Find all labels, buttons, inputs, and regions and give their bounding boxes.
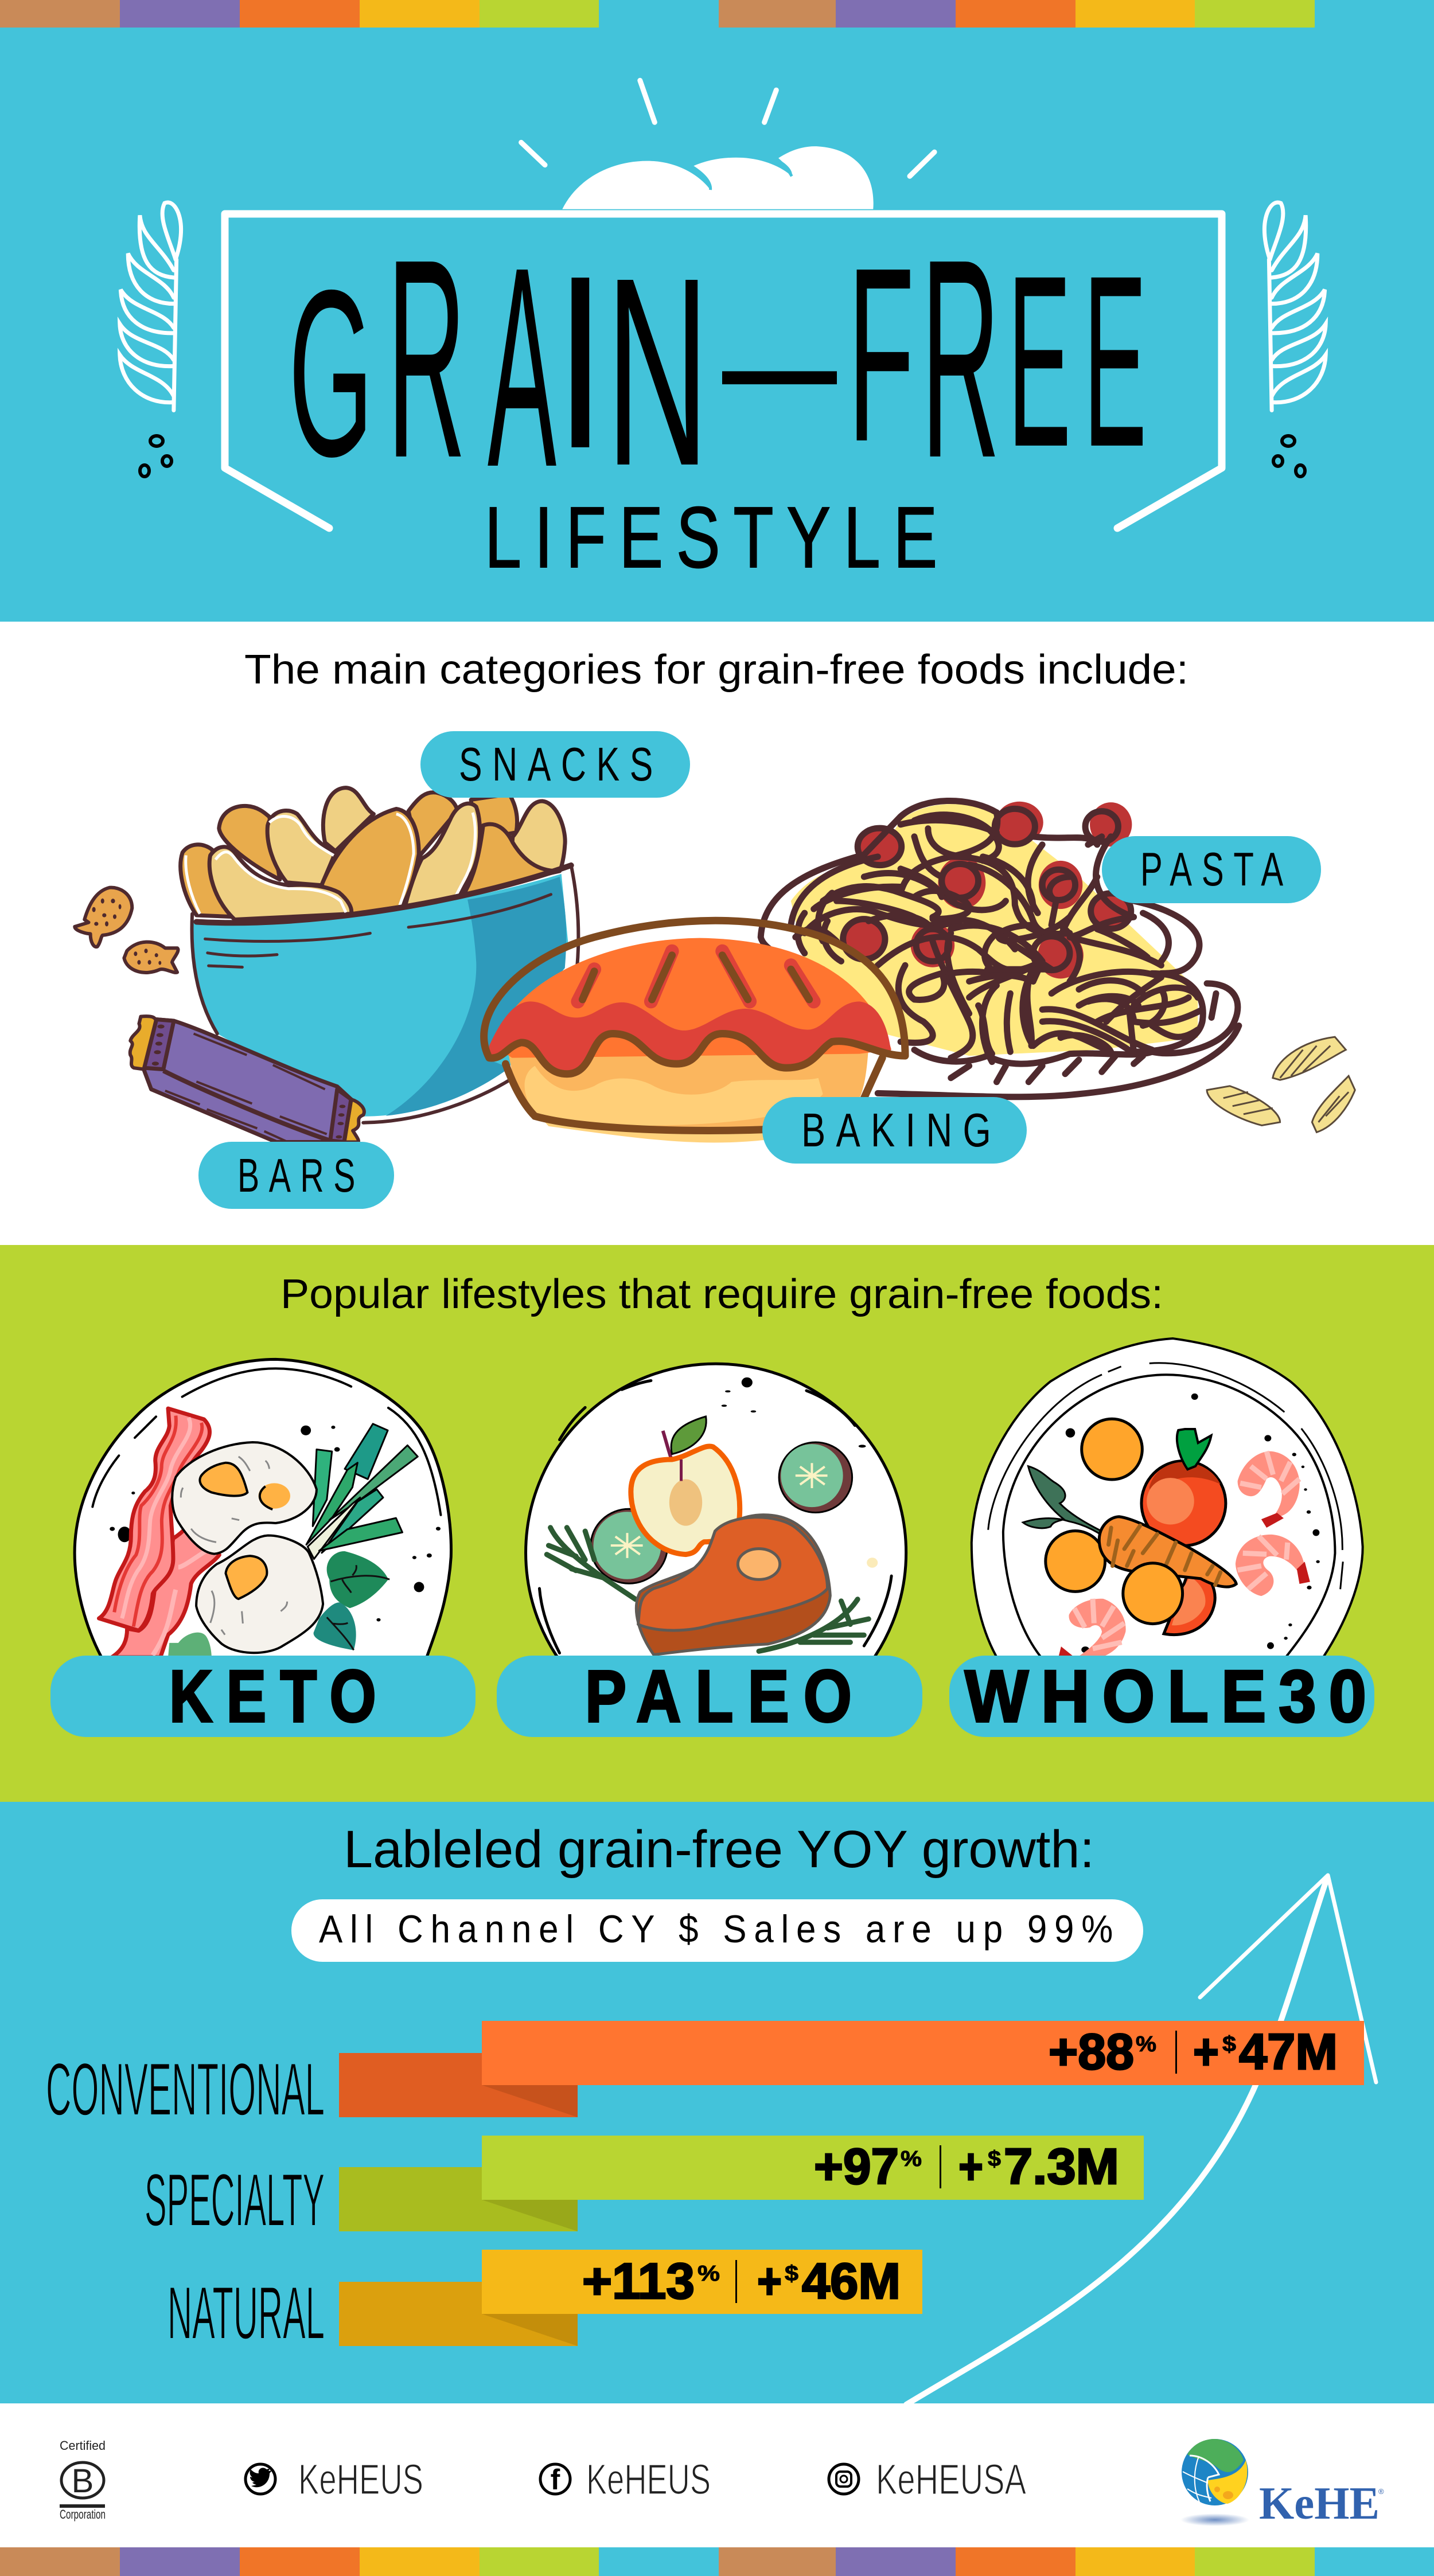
label: pasta: [1102, 836, 1321, 903]
bar: natural: $: [785, 2262, 798, 2286]
label: paleo: PALEO: [585, 1656, 866, 1738]
logo: certified b corporation: Corporation: [60, 2507, 106, 2522]
title: grain-free: G: [289, 241, 373, 506]
bar: natural: %: [697, 2262, 720, 2286]
bowl body: [192, 874, 568, 1117]
plate: paleo: [524, 1363, 907, 1656]
title: grain-free: E: [1084, 225, 1147, 498]
bar: natural: [339, 2250, 922, 2346]
title: grain-free: N: [606, 221, 710, 522]
bar: specialty: +97: [814, 2138, 899, 2195]
illustration: candy bar: [130, 1016, 364, 1142]
title: grain-free: [289, 201, 1147, 526]
orange slice left: [1046, 1531, 1105, 1591]
panel: header: [0, 0, 1434, 622]
heading: lifestyles: Popular lifestyles that require grain-free foods:: [280, 1271, 1163, 1317]
bar: natural: +: [757, 2253, 782, 2309]
label: bars: [198, 1142, 394, 1209]
label: keto: KETO: [169, 1656, 390, 1738]
right dots: [1273, 436, 1305, 477]
panel: growth: SPECIALTY: [145, 2158, 325, 2242]
left wheat: [120, 202, 181, 411]
title: grain-free: —: [722, 252, 837, 469]
illustration: chips bowl: [181, 788, 578, 1123]
apple: [631, 1416, 740, 1555]
orange slice top: [1082, 1419, 1142, 1480]
heading: categories: The main categories for grain-free foods include:: [244, 647, 1188, 693]
bar: conventional: %: [1136, 2032, 1156, 2056]
logo: kehe: [1180, 2439, 1384, 2529]
label: keto: [50, 1656, 476, 1738]
bowl rim and marks: [192, 865, 578, 1123]
title: grain-free: A: [488, 209, 557, 526]
kiwi: [591, 1442, 852, 1583]
social: facebook: f: [551, 2464, 560, 2496]
social handle: facebook: KeHEUS: [586, 2456, 711, 2503]
title frame outline: [225, 214, 1222, 528]
social handle: instagram: KeHEUSA: [876, 2456, 1026, 2503]
label: pasta: PASTA: [1140, 842, 1293, 896]
social: facebook: [540, 2464, 570, 2496]
heading: growth: Lableled grain-free YOY growth:: [344, 1820, 1094, 1879]
orange slice front: [1123, 1563, 1183, 1624]
bowl shade: [386, 877, 566, 1116]
label: whole30: WHOLE30: [965, 1656, 1379, 1738]
herb: [1023, 1466, 1103, 1535]
bar: natural: +113: [582, 2253, 695, 2309]
title: grain-free: R: [387, 201, 466, 517]
label: baking: BAKING: [801, 1103, 1002, 1157]
bar: specialty: $: [988, 2147, 1001, 2171]
tomato slice: [1164, 1564, 1215, 1635]
bacon: [99, 1408, 219, 1657]
illustration: pasta: [759, 800, 1240, 1097]
panel: categories: [0, 622, 1434, 1245]
plate: keto: [75, 1359, 451, 1657]
bar: specialty: +: [958, 2138, 983, 2195]
eggs: [172, 1442, 323, 1653]
bottom colour strip: [0, 2547, 1434, 2576]
title: grain-free: F: [848, 216, 914, 493]
icon: sun cloud with rays: [521, 80, 934, 209]
illustration: cracker fish: [75, 888, 178, 973]
panel: footer: [0, 2403, 1434, 2547]
title: grain-free: I: [554, 225, 607, 500]
panel: growth: [0, 1802, 1434, 2405]
callout: all channel: All Channel CY $ Sales are up 99%: [319, 1907, 1120, 1951]
panel: growth: NATURAL: [167, 2271, 325, 2355]
bar: specialty: 7.3M: [1004, 2138, 1119, 2195]
bar: conventional: 47M: [1239, 2023, 1338, 2080]
social handle: twitter: KeHEUS: [298, 2456, 423, 2503]
bar: conventional: [339, 2021, 1364, 2117]
label: baking: [762, 1097, 1027, 1164]
chips: [181, 788, 565, 919]
bar: specialty: %: [901, 2147, 922, 2171]
left dots: [140, 436, 172, 477]
right wheat: [1264, 202, 1326, 411]
carrot: [1099, 1517, 1236, 1587]
logo: kehe: KeHE: [1259, 2479, 1380, 2529]
subtitle: lifestyle: LIFESTYLE: [485, 489, 950, 586]
social: instagram: [829, 2464, 859, 2494]
callout: all channel: [291, 1899, 1143, 1962]
arrow: growth curve: [906, 1875, 1376, 2405]
shrimp: [1058, 1451, 1310, 1659]
label: bars: BARS: [237, 1149, 365, 1202]
social: twitter: [246, 2464, 275, 2494]
spinach: [168, 1551, 389, 1657]
bar: conventional: $: [1222, 2032, 1236, 2056]
title: grain-free: R: [921, 201, 1000, 517]
bar: conventional: +88: [1049, 2023, 1134, 2080]
illustration: fusilli: [1207, 1037, 1355, 1132]
logo: certified b corporation: [60, 2438, 106, 2522]
plate: whole30: [972, 1338, 1363, 1659]
bar: specialty: [339, 2136, 1144, 2231]
label: snacks: SNACKS: [459, 737, 663, 791]
steak: [636, 1515, 830, 1655]
logo: kehe: ®: [1378, 2487, 1384, 2496]
bar: natural: 46M: [802, 2253, 901, 2309]
bar: conventional: +: [1193, 2023, 1219, 2080]
rosemary: [547, 1528, 868, 1651]
panel: lifestyles: [0, 1245, 1434, 1802]
title: grain-free: E: [1008, 225, 1071, 498]
top colour strip: [0, 0, 1315, 28]
label: snacks: [420, 731, 690, 798]
logo: certified b corporation: B: [72, 2462, 93, 2500]
leek: [306, 1424, 418, 1559]
illustration: pie: [484, 920, 905, 1142]
logo: certified b corporation: Certified: [60, 2438, 106, 2453]
tomato: [1141, 1429, 1226, 1545]
panel: growth: CONVENTIONAL: [46, 2047, 325, 2131]
